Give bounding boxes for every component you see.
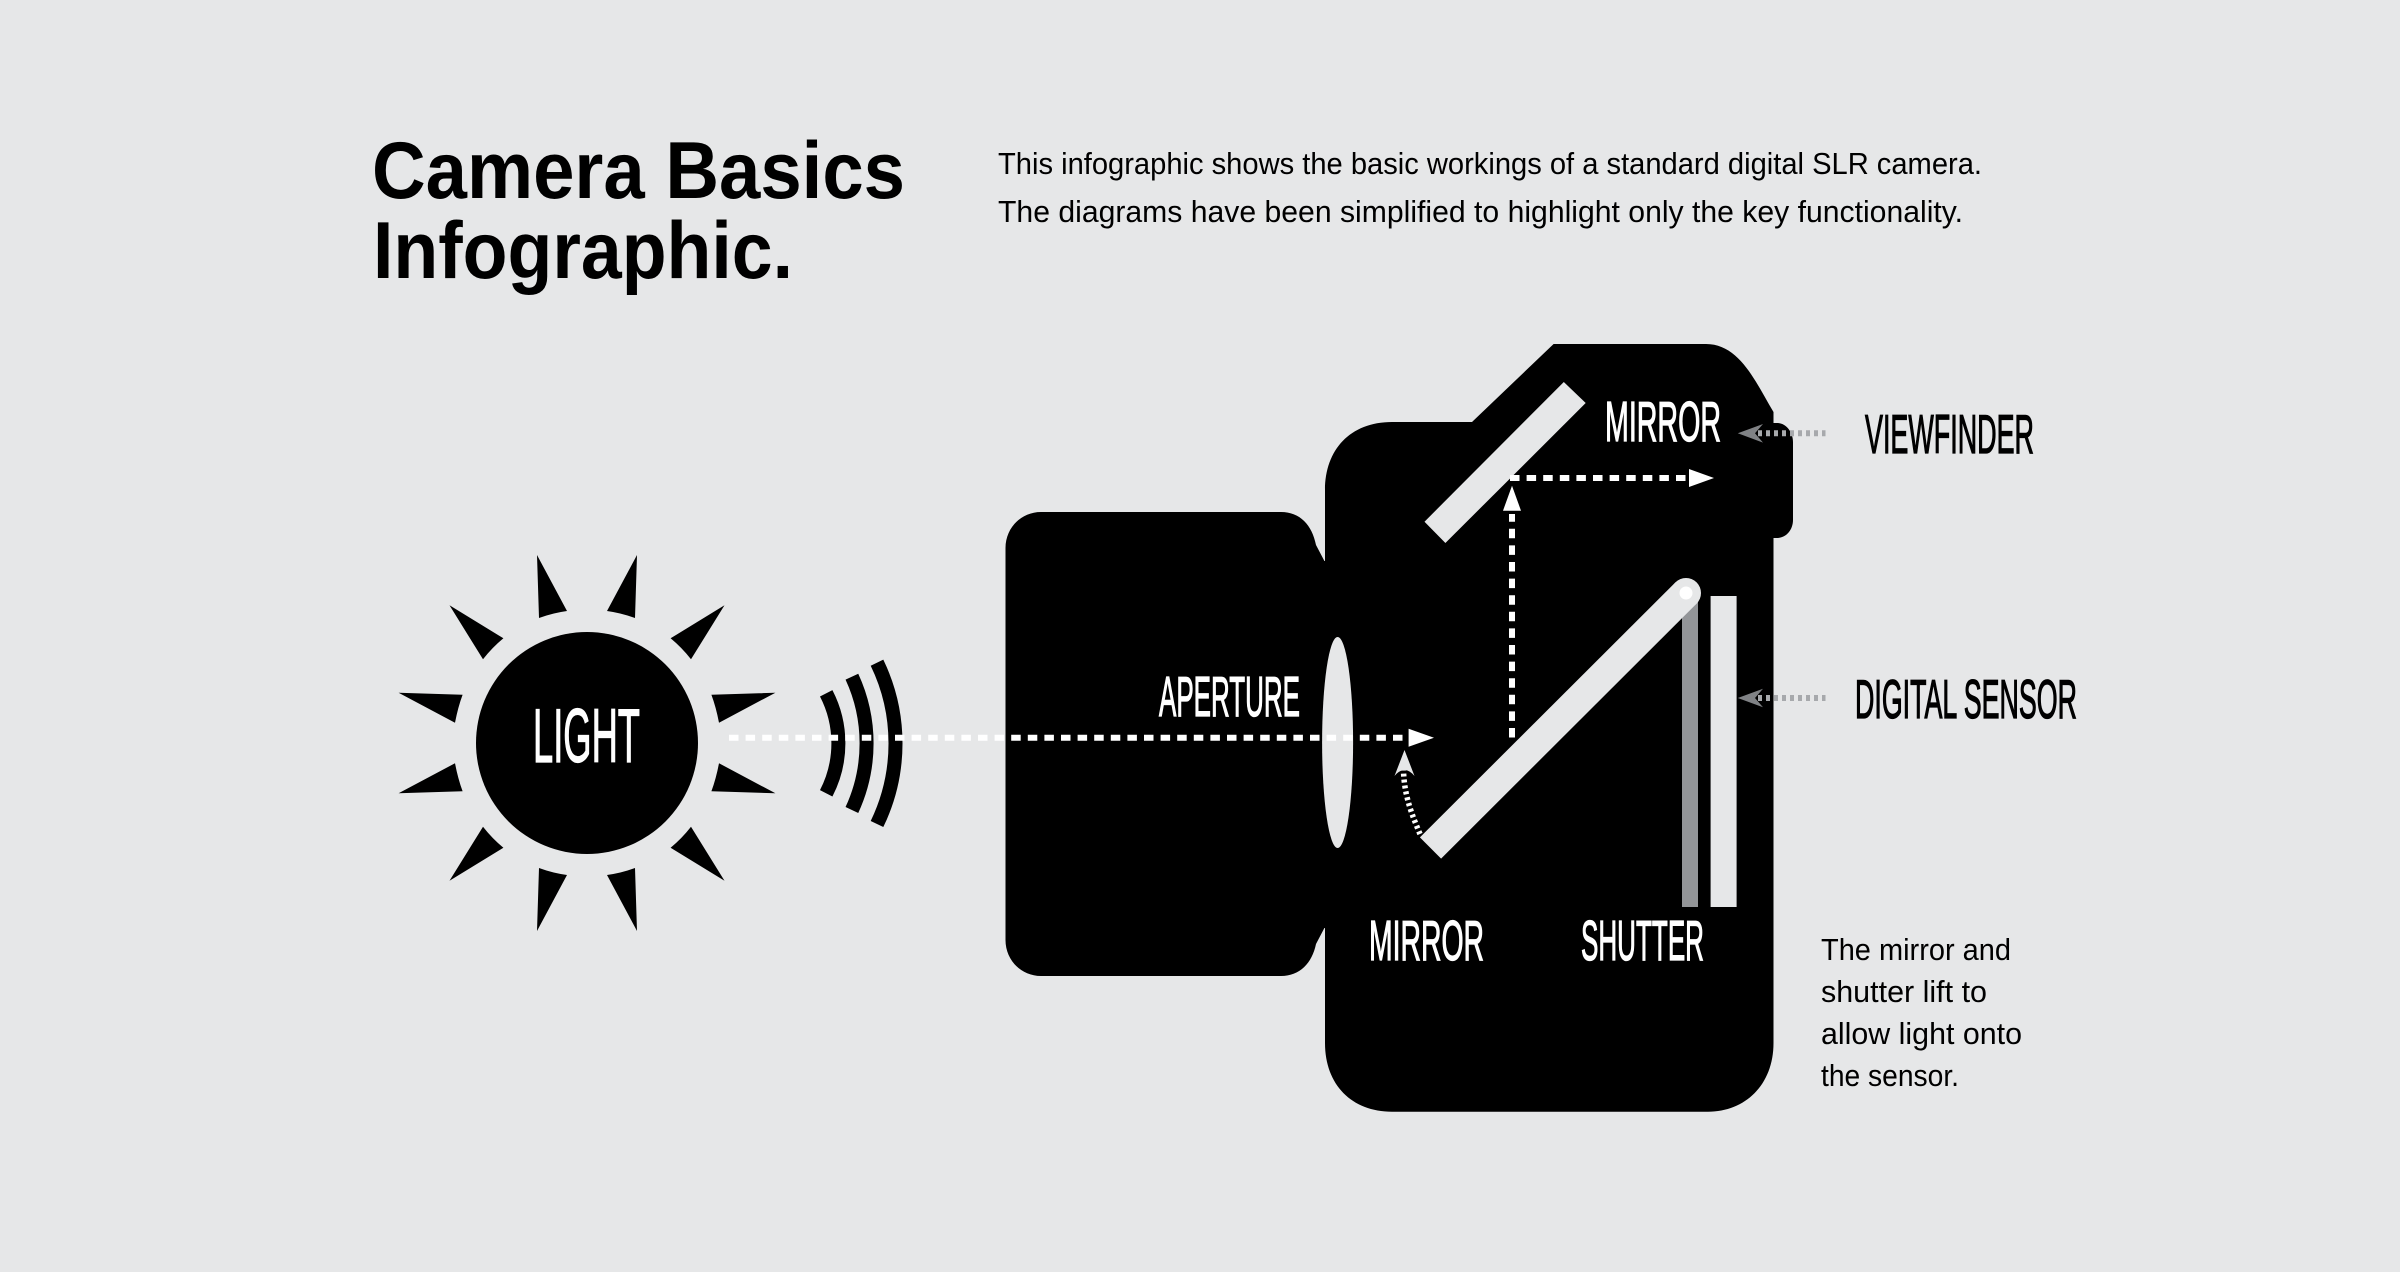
arrow: digital sensor [1738, 689, 1826, 707]
text: LIGHT [533, 694, 640, 779]
main mirror [1430, 578, 1701, 848]
text: DIGITAL SENSOR [1855, 668, 2077, 730]
text: APERTURE [1159, 665, 1300, 729]
intro text [998, 146, 1982, 229]
title [372, 126, 905, 296]
note text: allow light onto [1821, 1016, 2022, 1051]
icon: light waves [826, 663, 896, 824]
arrow: mirror lift [1394, 750, 1420, 834]
digital sensor [1711, 596, 1737, 907]
camera body [1325, 344, 1793, 1112]
note text [1821, 932, 2022, 1093]
label: top mirror: MIRROR [1605, 390, 1721, 454]
text: MIRROR [1369, 909, 1484, 973]
intro text: The diagrams have been simplified to highlight only the key functionality. [998, 194, 1963, 229]
note text: the sensor. [1821, 1058, 1959, 1093]
arrow: light path up to top mirror [1503, 486, 1521, 738]
lens element [1322, 637, 1353, 848]
icon: sun [399, 555, 775, 931]
title: Infographic. [373, 206, 793, 296]
arrow: light path through lens [729, 729, 1434, 747]
shutter [1682, 600, 1698, 907]
note text: shutter lift to [1821, 974, 1987, 1009]
intro text: This infographic shows the basic workings of a standard digital SLR camera. [998, 146, 1982, 181]
note text: The mirror and [1821, 932, 2011, 967]
text: SHUTTER [1581, 909, 1704, 973]
title: Camera Basics [372, 126, 905, 216]
arrow: viewfinder [1738, 424, 1826, 443]
text: VIEWFINDER [1865, 403, 2034, 465]
top mirror [1424, 382, 1586, 543]
arrow: light path to viewfinder [1510, 469, 1714, 487]
camera lens body [1006, 512, 1335, 976]
